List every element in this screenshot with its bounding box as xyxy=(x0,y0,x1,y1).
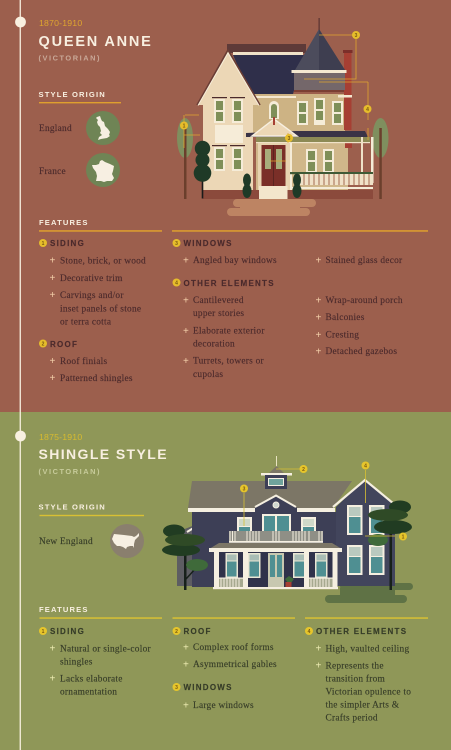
list: siding: + xyxy=(50,290,56,301)
porch posts xyxy=(290,143,292,190)
steps xyxy=(259,186,288,199)
list: other elements: 4 xyxy=(308,629,311,635)
list: other elements: + xyxy=(316,660,322,672)
style origin: Queen Anne xyxy=(38,90,121,187)
fascia xyxy=(188,508,256,512)
list: siding: + xyxy=(50,273,56,284)
panel: Queen Anne background xyxy=(0,0,451,412)
list: siding: Natural or single-color xyxy=(60,644,151,654)
list: roof xyxy=(172,627,277,670)
list: other elements: Elaborate exterior xyxy=(193,326,265,336)
list: other elements: + xyxy=(183,356,189,367)
list: siding: SIDING xyxy=(50,239,85,248)
list: other elements: Victorian opulence to xyxy=(326,688,411,698)
right wing windows xyxy=(347,505,384,575)
balcony rail xyxy=(229,531,323,543)
list: roof: ROOF xyxy=(50,340,78,349)
list: roof: Patterned shingles xyxy=(60,374,133,384)
list: siding: Lacks elaborate xyxy=(60,674,123,684)
heading: Queen Anne: QUEEN ANNE xyxy=(38,34,153,50)
list: other elements: decoration xyxy=(193,340,235,350)
left tree xyxy=(162,524,208,590)
timeline dot: Shingle Style xyxy=(15,431,26,441)
list: other elements: Wrap-around porch xyxy=(326,296,403,306)
main roof xyxy=(188,481,352,508)
list: siding: + xyxy=(50,674,56,684)
dormer and cupola xyxy=(261,456,292,489)
features: Queen Anne: FEATURES xyxy=(39,218,89,227)
list: siding: ornamentation xyxy=(60,688,117,698)
list: windows: 3 xyxy=(175,685,178,691)
list: siding: + xyxy=(50,644,56,654)
list: roof: Complex roof forms xyxy=(193,642,274,653)
list: roof: + xyxy=(183,642,189,654)
upper windows xyxy=(237,514,316,542)
porch roof xyxy=(246,131,368,137)
panel: Shingle Style background xyxy=(0,412,451,750)
foundation xyxy=(203,190,373,199)
porch roof xyxy=(209,543,342,549)
list: other elements: + xyxy=(316,296,322,306)
tan middle body xyxy=(253,94,345,134)
annotation markers xyxy=(240,462,407,540)
annotation markers: 2 xyxy=(302,467,305,473)
list: roof xyxy=(39,340,133,384)
gable wing windows xyxy=(212,97,245,171)
tree right xyxy=(372,118,388,199)
porch gable xyxy=(252,119,297,136)
icon: France map xyxy=(86,153,120,187)
list: other elements: Represents the xyxy=(326,662,384,672)
right wing xyxy=(336,479,395,586)
list: windows: Stained glass decor xyxy=(326,256,403,266)
list: siding: SIDING xyxy=(50,627,85,636)
list: siding xyxy=(39,239,146,328)
illustration: Shingle Style house xyxy=(162,456,413,603)
list: roof: + xyxy=(50,356,56,367)
porch windows xyxy=(306,149,334,173)
list: other elements: the simpler Arts & xyxy=(326,700,400,710)
front door xyxy=(258,143,292,190)
list: other elements: + xyxy=(316,330,322,341)
list: other elements: Cresting xyxy=(326,330,359,340)
list: siding: shingles xyxy=(60,658,93,668)
list: roof: + xyxy=(183,660,189,670)
annotation markers: 4 xyxy=(364,463,367,469)
arched window xyxy=(269,101,279,119)
list: roof: + xyxy=(50,373,56,384)
porch columns xyxy=(213,551,338,589)
list: siding: inset panels of stone xyxy=(60,304,141,314)
features: Shingle Style xyxy=(39,605,428,724)
list: other elements: + xyxy=(316,346,322,358)
heading: Shingle Style xyxy=(38,432,168,476)
list: windows: Angled bay windows xyxy=(193,256,277,266)
list: other elements: upper stories xyxy=(193,309,244,319)
style origin: Queen Anne: France xyxy=(39,167,66,177)
annotation markers: 3 xyxy=(355,33,358,39)
list: siding: + xyxy=(50,256,56,266)
list: siding: 1 xyxy=(42,629,45,635)
illustration: Queen Anne house xyxy=(177,18,388,216)
heading: Queen Anne xyxy=(38,18,153,62)
list: other elements: cupolas xyxy=(193,370,223,380)
porch windows and door xyxy=(219,552,334,588)
porch rails xyxy=(219,578,332,587)
left wing xyxy=(177,523,222,586)
list: other elements: High, vaulted ceiling xyxy=(326,644,409,654)
annotation markers: 3 xyxy=(288,136,291,142)
list: windows: WINDOWS xyxy=(184,683,233,692)
list: windows: + xyxy=(183,256,189,266)
tower windows xyxy=(297,98,343,125)
tower xyxy=(294,73,345,90)
timeline line xyxy=(20,0,21,750)
list: other elements: Detached gazebos xyxy=(326,347,397,357)
list: roof: 2 xyxy=(42,341,45,347)
list: other elements: OTHER ELEMENTS xyxy=(316,627,407,636)
list: other elements: Turrets, towers or xyxy=(193,356,264,366)
topiary tree xyxy=(194,141,211,198)
list: other elements: OTHER ELEMENTS xyxy=(184,279,275,288)
heading: Shingle Style: SHINGLE STYLE xyxy=(38,446,168,462)
list: siding: 1 xyxy=(42,241,45,247)
chimney xyxy=(344,53,352,130)
list: other elements: transition from xyxy=(326,674,386,684)
features: Queen Anne xyxy=(39,218,428,384)
list: siding xyxy=(39,627,151,698)
annotation markers xyxy=(180,31,372,142)
heading: Shingle Style: (VICTORIAN) xyxy=(38,467,101,476)
list: siding: Carvings and/or xyxy=(60,291,124,301)
style origin: Shingle Style xyxy=(38,502,144,558)
list: windows: + xyxy=(183,700,189,712)
list: roof: ROOF xyxy=(184,627,212,636)
annotation markers: 1 xyxy=(183,123,186,129)
list: windows: 3 xyxy=(175,241,178,247)
list: other elements: Balconies xyxy=(326,313,365,323)
icon: Great Britain map xyxy=(86,111,120,145)
annotation lines xyxy=(244,469,395,536)
style origin: Shingle Style: STYLE ORIGIN xyxy=(38,502,106,512)
list: other elements: + xyxy=(183,296,189,306)
porch wall xyxy=(256,133,348,190)
list: other elements: Cantilevered xyxy=(193,296,244,306)
ground shadow xyxy=(325,583,413,603)
list: other elements: + xyxy=(316,644,322,654)
list: windows: + xyxy=(316,256,322,266)
style origin: Shingle Style: New England xyxy=(39,537,93,547)
list: windows: WINDOWS xyxy=(184,239,233,248)
heading: Shingle Style: 1875-1910 xyxy=(39,432,82,442)
cresting xyxy=(227,44,306,53)
list: siding: Stone, brick, or wood xyxy=(60,256,146,266)
list: siding: Decorative trim xyxy=(60,274,123,284)
center gable xyxy=(255,495,297,530)
porch railing xyxy=(290,172,373,189)
annotation markers: 3 xyxy=(243,486,246,492)
list: other elements: + xyxy=(316,312,322,324)
list: other elements: 4 xyxy=(175,280,178,286)
list: windows xyxy=(172,683,254,712)
icon: United States map xyxy=(110,524,144,558)
main roof xyxy=(233,55,304,94)
list: siding: or terra cotta xyxy=(60,318,112,328)
annotation markers: 1 xyxy=(402,534,405,540)
right tree xyxy=(368,500,412,590)
ground path xyxy=(227,199,316,216)
dark body xyxy=(192,512,337,587)
front gable wing xyxy=(197,50,260,190)
features: Shingle Style: FEATURES xyxy=(39,605,89,614)
shrubs xyxy=(242,174,302,198)
style origin: Queen Anne: England xyxy=(39,124,72,134)
heading: Queen Anne: (VICTORIAN) xyxy=(38,54,101,62)
list: roof: 2 xyxy=(175,629,178,635)
style origin: Queen Anne: STYLE ORIGIN xyxy=(38,90,106,99)
list: other elements xyxy=(172,278,403,380)
heading: Queen Anne: 1870-1910 xyxy=(39,18,82,28)
potted plant xyxy=(285,576,294,587)
annotation markers: 4 xyxy=(366,107,369,113)
list: other elements: Crafts period xyxy=(326,712,378,724)
list: other elements xyxy=(305,627,411,724)
list: other elements: + xyxy=(183,326,189,337)
list: windows: Large windows xyxy=(193,701,254,711)
list: roof: Asymmetrical gables xyxy=(193,660,277,670)
list: windows xyxy=(172,239,403,266)
list: roof: Roof finials xyxy=(60,356,107,367)
tree left xyxy=(177,118,193,199)
timeline dot: Queen Anne xyxy=(15,17,26,27)
annotation lines xyxy=(184,35,368,161)
